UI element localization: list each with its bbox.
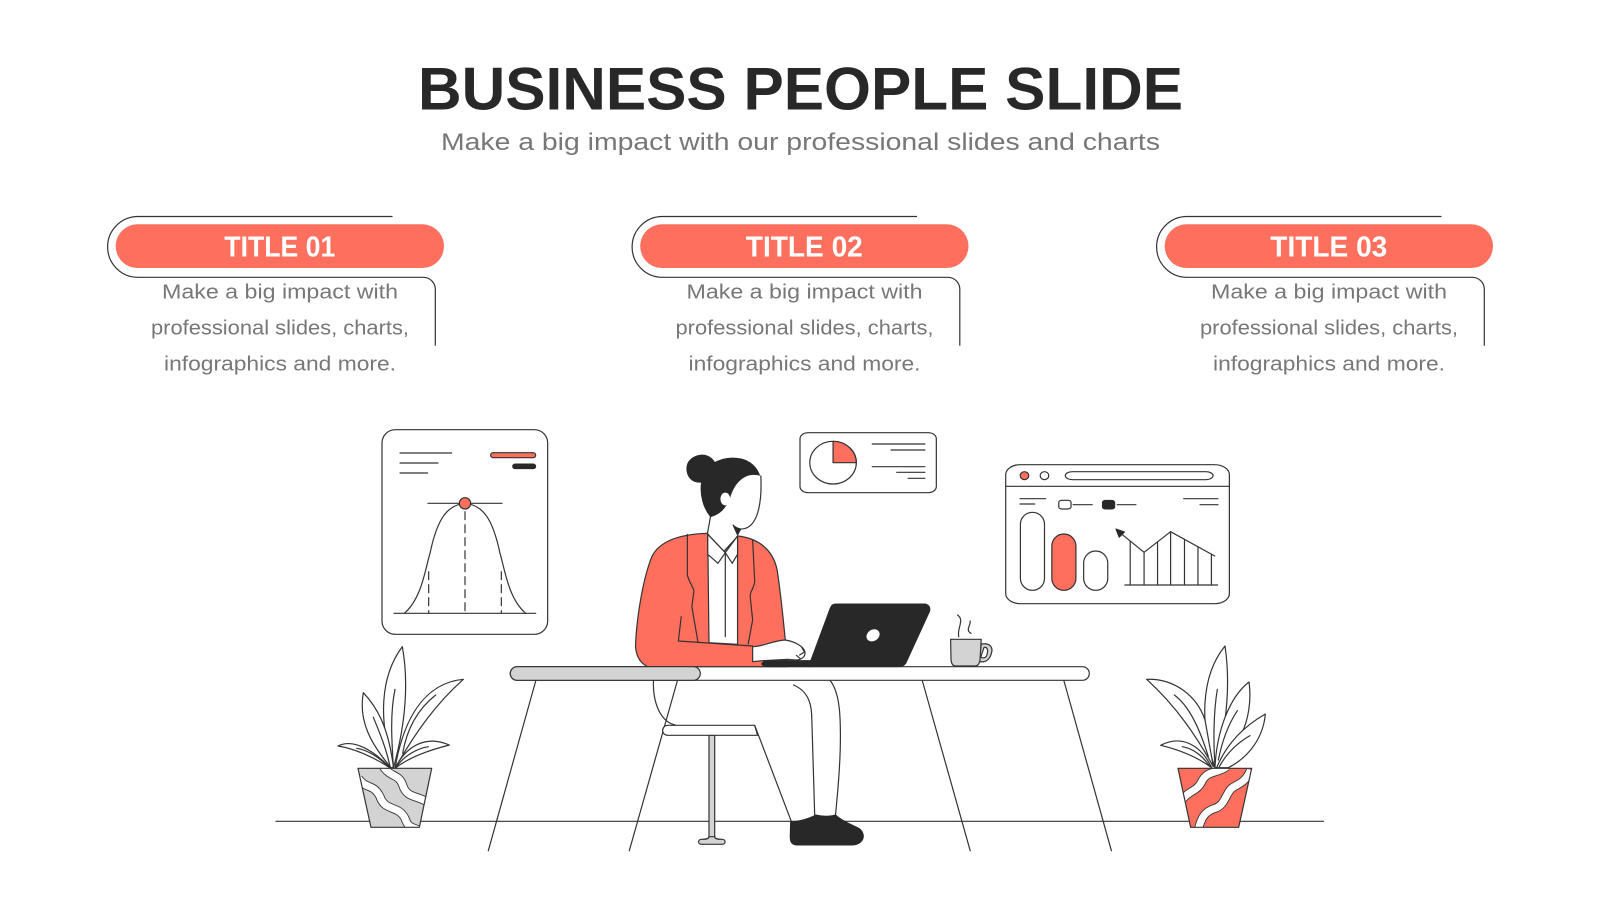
panel: title 01	[108, 216, 444, 376]
coral pot	[1178, 767, 1252, 829]
bracket outline	[632, 216, 960, 345]
shirt	[708, 534, 738, 644]
grey pot	[358, 767, 432, 830]
browser window chart	[1006, 465, 1229, 604]
pill label: TITLE 01	[224, 232, 335, 264]
pill heading	[640, 224, 968, 268]
bell curve chart panel	[382, 430, 548, 634]
face	[720, 475, 761, 535]
description	[151, 282, 409, 376]
description	[676, 282, 934, 376]
floor line	[276, 820, 1324, 822]
description: Make a big impact with	[162, 282, 398, 304]
subtitle: Make a big impact with our professional slides and charts	[441, 129, 1160, 156]
coffee cup	[951, 615, 992, 666]
bell curve	[394, 498, 536, 613]
left plant	[338, 647, 463, 830]
jacket lapels and sleeve	[678, 534, 755, 646]
line chart with arrow	[1116, 529, 1218, 585]
hair	[687, 455, 760, 517]
pill heading	[116, 224, 444, 268]
description: professional slides, charts,	[151, 318, 409, 340]
description: infographics and more.	[688, 354, 920, 376]
description: professional slides, charts,	[676, 318, 934, 340]
jacket	[636, 533, 787, 667]
bracket outline	[1157, 216, 1484, 345]
description: infographics and more.	[164, 354, 396, 376]
laptop	[762, 604, 930, 667]
description: infographics and more.	[1213, 354, 1445, 376]
leaves	[338, 647, 463, 768]
description	[1200, 282, 1458, 376]
pill heading	[1165, 224, 1493, 268]
pill label: TITLE 02	[746, 232, 863, 264]
woman at desk	[636, 455, 930, 845]
desk grey overlay	[510, 667, 700, 680]
desk legs	[488, 681, 1111, 851]
leaves	[1147, 646, 1265, 768]
hand	[753, 640, 805, 662]
pie	[810, 441, 856, 484]
title: BUSINESS PEOPLE SLIDE	[418, 56, 1183, 122]
pill label: TITLE 03	[1270, 232, 1387, 264]
panel: title 02	[632, 216, 968, 376]
bracket outline	[108, 216, 435, 345]
stool	[663, 725, 758, 844]
description: Make a big impact with	[686, 282, 922, 304]
card text lines	[872, 444, 925, 478]
description: Make a big impact with	[1211, 282, 1447, 304]
window text and legend	[1020, 499, 1218, 509]
trousers	[653, 681, 840, 822]
neck and face	[707, 516, 738, 537]
legend pills	[491, 453, 536, 469]
browser toolbar	[1006, 472, 1229, 486]
desk top	[510, 667, 1089, 680]
chart text lines	[400, 453, 452, 473]
steam	[958, 615, 971, 637]
bar chart	[1020, 512, 1108, 590]
description: professional slides, charts,	[1200, 318, 1458, 340]
shoe	[790, 815, 863, 845]
pie chart card	[800, 433, 936, 493]
right plant	[1147, 646, 1265, 829]
panel: title 03	[1157, 216, 1493, 376]
